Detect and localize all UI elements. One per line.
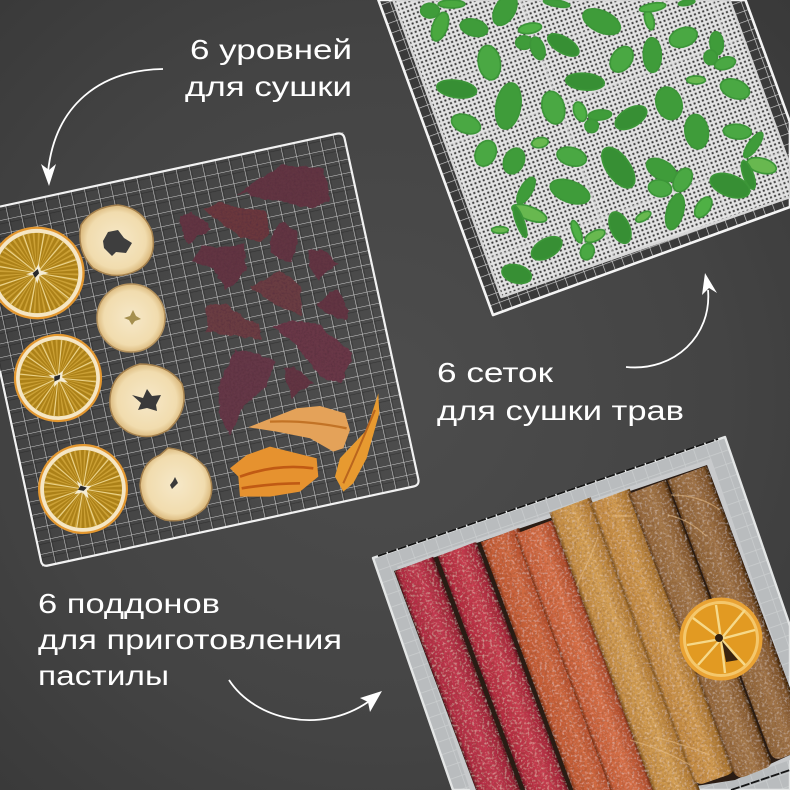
heading: 6 trays for fruit leather: пастилы xyxy=(38,660,169,691)
wire rack grid xyxy=(0,132,420,567)
panel: drying mesh with mint leaves xyxy=(378,0,790,315)
heading: 6 trays for fruit leather: 6 поддонов xyxy=(38,588,220,619)
heading: 6 trays for fruit leather xyxy=(38,588,342,691)
heading: 6 levels for drying xyxy=(185,34,352,102)
arrow: to wire rack xyxy=(41,69,163,186)
wire rack frame xyxy=(378,0,790,315)
perforated mat xyxy=(393,0,790,297)
heading: 6 herb meshes: для сушки трав xyxy=(437,395,684,426)
arrow: to herb mesh xyxy=(626,273,717,367)
tray xyxy=(373,437,790,790)
roll seams xyxy=(576,495,720,765)
dried meat jerky pieces xyxy=(180,165,353,436)
dried orange slice on rolls xyxy=(680,598,762,680)
panel: wire rack with fruit and jerky xyxy=(0,132,420,567)
fruit leather rolls xyxy=(395,466,790,790)
heading: 6 levels for drying: 6 уровней xyxy=(190,34,352,65)
panel: fruit leather tray xyxy=(373,437,790,790)
dried orange slices xyxy=(0,219,141,547)
dried apple slices xyxy=(80,205,212,521)
heading: 6 herb meshes: 6 сеток xyxy=(437,357,554,388)
arrow: to tray xyxy=(229,680,382,720)
heading: 6 herb meshes xyxy=(437,357,684,426)
heading: 6 levels for drying: для сушки xyxy=(185,71,352,102)
dried fish pieces xyxy=(230,393,379,497)
heading: 6 trays for fruit leather: для приготовления xyxy=(38,624,342,655)
mint leaves xyxy=(421,0,778,287)
